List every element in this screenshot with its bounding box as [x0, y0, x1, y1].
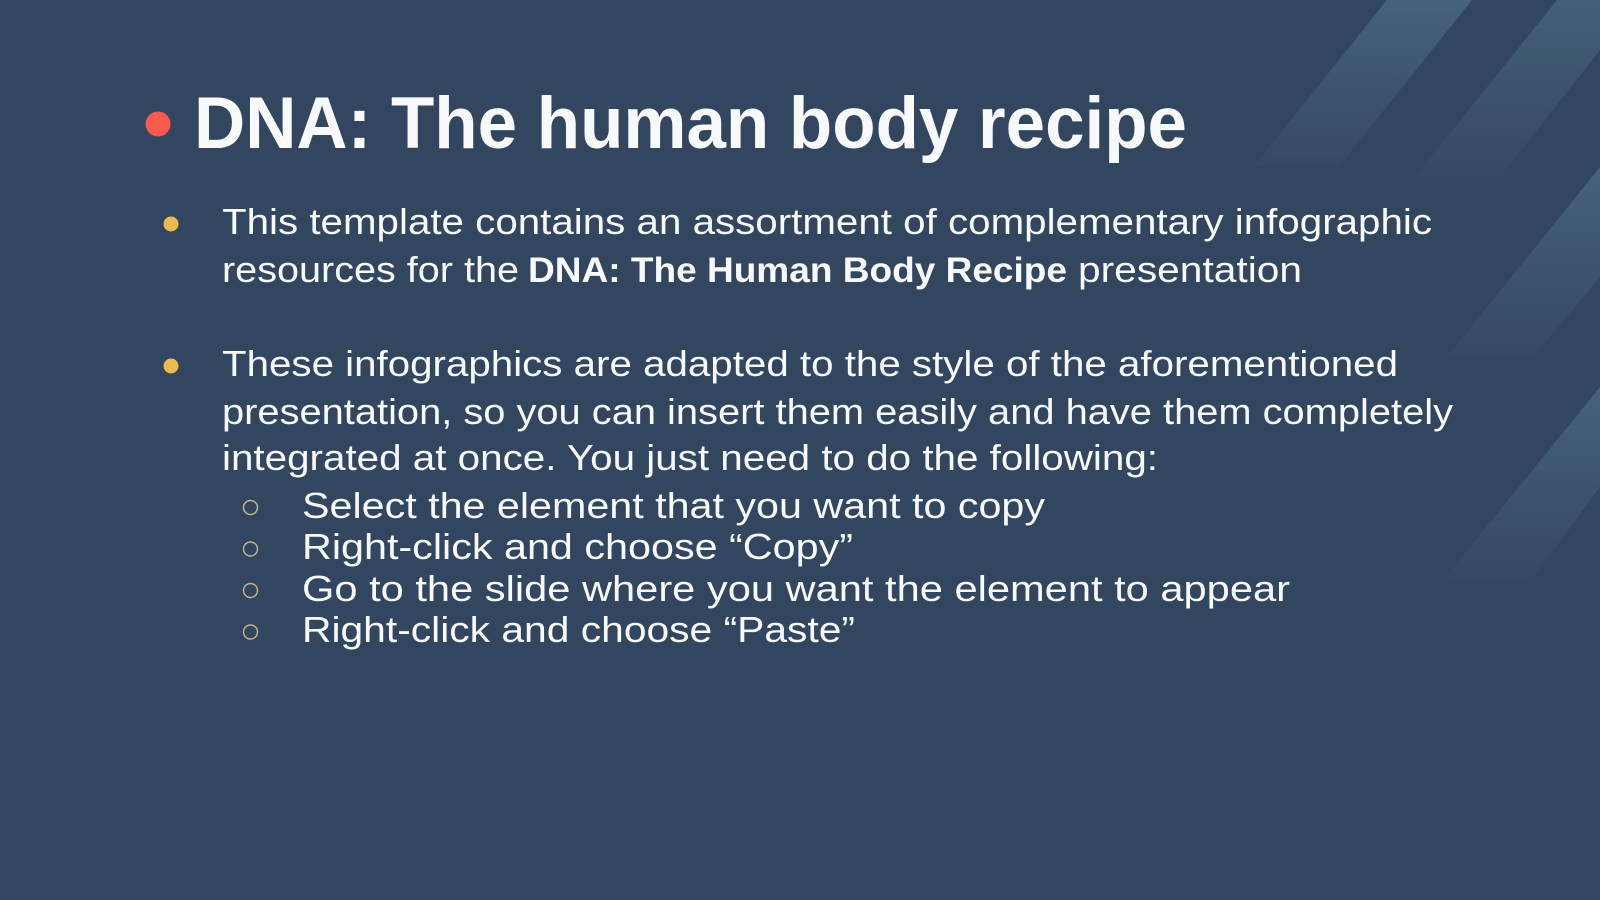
icon: yellow bullet	[164, 358, 178, 374]
step 1: Select the element that you want to copy	[302, 485, 1045, 526]
step 2: Right-click and choose “Copy”	[302, 526, 853, 567]
title text: DNA: The human body recipe	[194, 83, 1187, 164]
paragraph line 2: presentation, so you can insert them easily and have them completely	[222, 391, 1453, 432]
paragraph line 1: This template contains an assortment of complementary infographic	[222, 201, 1432, 242]
text block: first paragraph	[164, 201, 1432, 290]
paragraph line 2: DNA: The Human Body Recipe	[528, 251, 1067, 290]
text block: second paragraph	[164, 343, 1453, 478]
list: copy and paste steps	[244, 485, 1290, 650]
step 4: Right-click and choose “Paste”	[302, 609, 855, 650]
paragraph line 2	[222, 249, 1302, 290]
icon: yellow bullet	[164, 216, 178, 232]
paragraph line 2: presentation	[1078, 249, 1302, 290]
title	[146, 83, 1187, 164]
paragraph line 3: integrated at once. You just need to do the following:	[222, 437, 1158, 478]
paragraph line 2: resources for the	[222, 249, 519, 290]
decorative diagonal bands	[1255, 0, 1600, 578]
icon: red title bullet	[146, 112, 170, 136]
paragraph line 1: These infographics are adapted to the style of the aforementioned	[222, 343, 1398, 384]
step 3: Go to the slide where you want the element to appear	[302, 568, 1290, 609]
